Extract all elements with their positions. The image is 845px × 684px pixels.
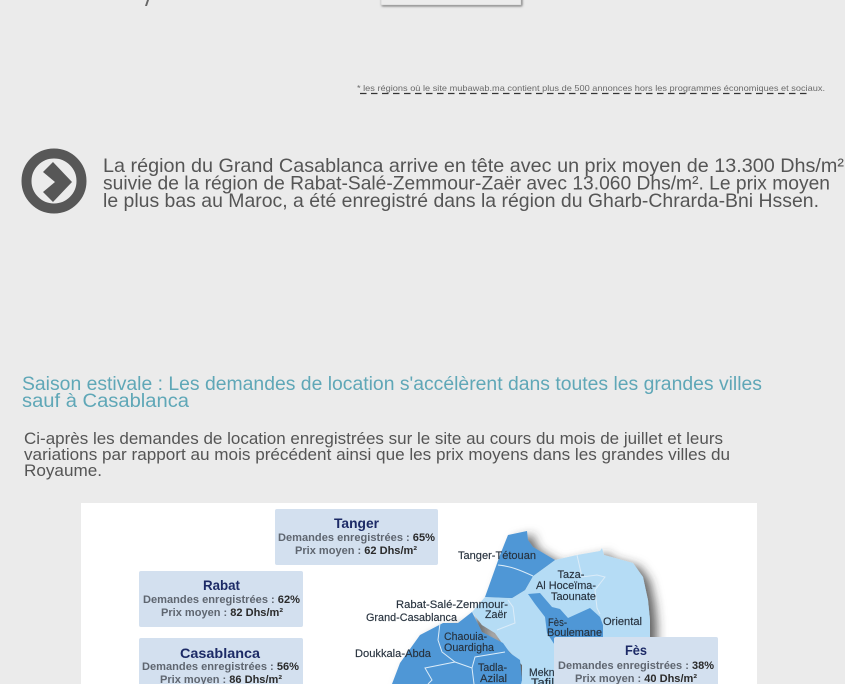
map labels: Fès-: [548, 617, 567, 629]
intro paragraph: variations par rapport au mois précédent ainsi que les prix moyens dans les grandes villes du: [24, 445, 730, 464]
map labels: Taounate: [551, 591, 596, 603]
callout: Rabat: [139, 571, 303, 627]
callout: Fès: Demandes enregistrées : 38%: [558, 660, 714, 672]
region: light blue north-east and centre: [472, 548, 650, 684]
intro paragraph: Ci-après les demandes de location enregistrées sur le site au cours du mois de juillet et leurs: [24, 429, 723, 448]
region borders: [425, 555, 605, 684]
heading: [22, 374, 762, 412]
callout: Fès: [554, 637, 718, 684]
callout: Fès: Fès: [625, 642, 647, 658]
map labels: Doukkala-Abda: [355, 648, 432, 660]
map labels: Meknès-: [529, 667, 569, 679]
region: Fès-Boulemane: [528, 593, 603, 644]
icon: chevron in circle: [26, 154, 82, 208]
text block: regional summary: le plus bas au Maroc, a été enregistré dans la région du Gharb-Chrarda-Bni Hssen.: [103, 190, 819, 212]
callout: Tanger: Demandes enregistrées : 65%: [278, 532, 435, 544]
callout: Casablanca: Demandes enregistrées : 56%: [142, 661, 299, 673]
panel: map of Morocco: [81, 503, 757, 684]
top fragment: clipped button: [381, 0, 521, 5]
map labels: Tadla-: [478, 662, 507, 674]
callout: Casablanca: [139, 638, 303, 684]
callout: Casablanca: Casablanca: [180, 645, 260, 661]
map labels: [355, 550, 642, 684]
text block: regional summary: [103, 155, 845, 212]
callout: Tanger: [275, 509, 438, 565]
map labels: Zaër: [485, 609, 507, 621]
text block: regional summary: suivie de la région de Rabat-Salé-Zemmour-Zaër avec 13.060 Dhs/m². Le prix moyen: [103, 172, 830, 194]
map labels: Tanger-Tétouan: [458, 550, 536, 562]
heading: sauf à Casablanca: [22, 391, 189, 412]
map regions: [388, 531, 650, 684]
map labels: Al Hoceïma-: [536, 580, 596, 592]
map labels: Boulemane: [547, 627, 602, 639]
callout: Tanger: Tanger: [334, 515, 380, 531]
region: Tanger-Tétouan and Gharb: [485, 531, 555, 598]
callout: Rabat: Demandes enregistrées : 62%: [143, 594, 300, 606]
map labels: Grand-Casablanca: [366, 612, 458, 624]
intro paragraph: Royaume.: [24, 461, 102, 480]
callout: Rabat: Rabat: [203, 577, 240, 593]
heading: Saison estivale : Les demandes de location s'accélèrent dans toutes les grandes villes: [22, 374, 762, 395]
text block: regional summary: La région du Grand Casablanca arrive en tête avec un prix moyen de 13.300 Dhs/m²: [103, 155, 845, 177]
map labels: Ouardigha: [444, 642, 495, 654]
map labels: Rabat-Salé-Zemmour-: [396, 599, 508, 611]
footnote: * les régions où le site mubawab.ma contient plus de 500 annonces hors les programmes économiques et sociaux.: [357, 83, 825, 93]
map labels: Chaouia-: [444, 631, 487, 643]
map labels: Taza-: [558, 569, 585, 581]
callout: Tanger: Prix moyen : 62 Dhs/m²: [295, 545, 417, 557]
map labels: Oriental: [603, 616, 642, 628]
top fragment: clipped letter: [145, 0, 149, 6]
region: Chaouia, Doukkala, Tadla: [388, 612, 522, 684]
intro paragraph: [24, 429, 730, 480]
callout: Rabat: Prix moyen : 82 Dhs/m²: [161, 607, 283, 619]
